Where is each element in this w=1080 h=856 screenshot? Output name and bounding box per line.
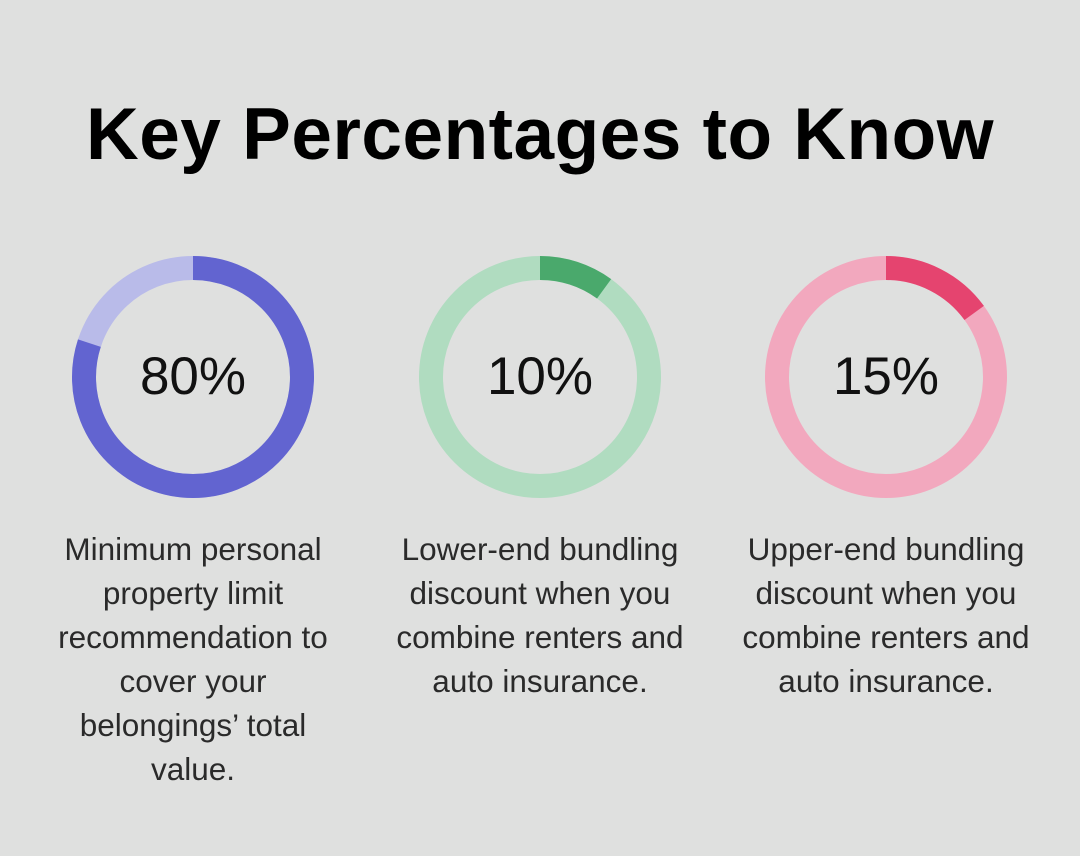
title: Key Percentages to Know — [86, 94, 994, 175]
description: 15%: auto insurance. — [778, 663, 994, 699]
donut: 80% — [72, 256, 314, 498]
description: 80%: cover your — [119, 663, 267, 699]
description: 10%: discount when you — [410, 575, 670, 611]
description: 80%: recommendation to — [58, 619, 328, 655]
donut: 10% — [419, 256, 661, 498]
description: 10% — [396, 531, 684, 699]
value: 15%: 15% — [833, 347, 939, 406]
description: 10%: auto insurance. — [432, 663, 648, 699]
description: 15%: combine renters and — [742, 619, 1030, 655]
description: 80% — [58, 531, 328, 787]
donut: 15% — [765, 256, 1007, 498]
description: 15%: discount when you — [756, 575, 1016, 611]
description: 80%: Minimum personal — [64, 531, 322, 567]
description: 15% — [742, 531, 1030, 699]
description: 15%: Upper-end bundling — [748, 531, 1024, 567]
description: 80%: property limit — [103, 575, 283, 611]
description: 80%: belongings’ total — [80, 707, 306, 743]
description: 10%: Lower-end bundling — [402, 531, 678, 567]
description: 80%: value. — [151, 751, 235, 787]
description: 10%: combine renters and — [396, 619, 684, 655]
value: 80%: 80% — [140, 347, 246, 406]
value: 10%: 10% — [487, 347, 593, 406]
